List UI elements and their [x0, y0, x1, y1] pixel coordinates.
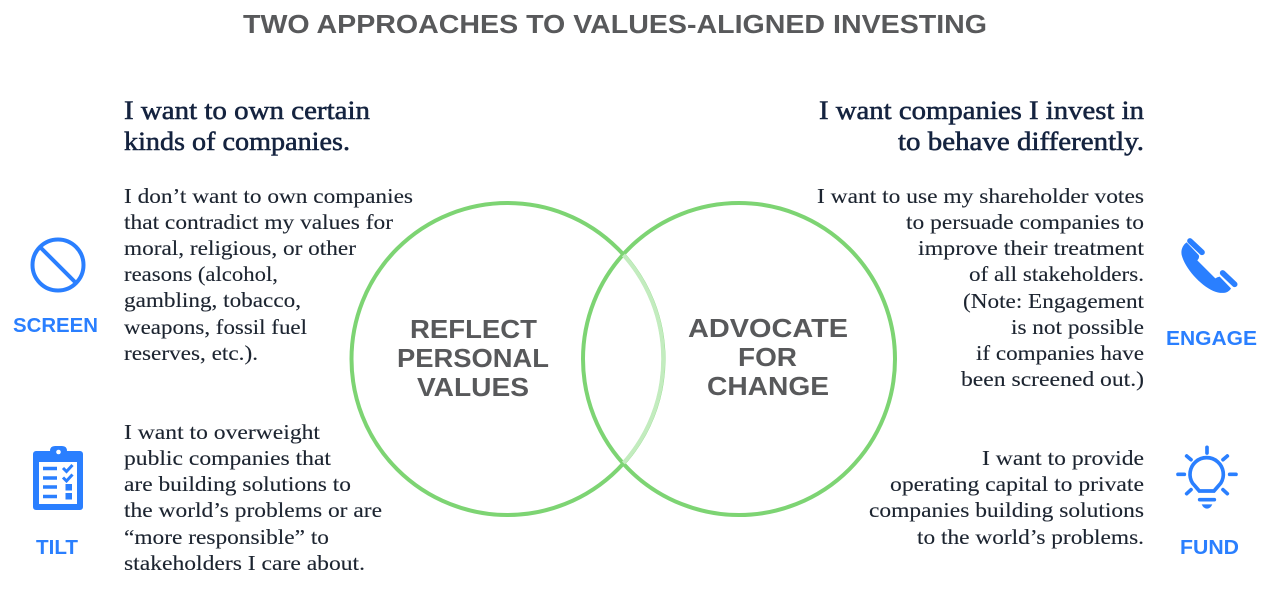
text block: screen: moral, religious, or other	[124, 236, 356, 260]
right heading: to behave differently.	[898, 127, 1144, 156]
overlap light arc	[624, 255, 663, 463]
text block: fund: operating capital to private	[890, 472, 1144, 496]
text block: tilt: the world’s problems or are	[124, 498, 382, 522]
text block: tilt: are building solutions to	[124, 472, 351, 496]
left circle label: REFLECT	[410, 314, 537, 344]
text block: tilt: public companies that	[124, 446, 331, 470]
label: engage: ENGAGE	[1166, 328, 1257, 350]
left heading: I want to own certain	[124, 96, 370, 125]
icon: engage telephone	[1181, 241, 1235, 293]
label: fund: FUND	[1180, 537, 1239, 559]
right circle label	[688, 313, 848, 401]
text block: fund: I want to provide	[982, 446, 1144, 470]
text block: engage: been screened out.)	[961, 367, 1144, 391]
text block: fund: companies building solutions	[869, 498, 1144, 522]
text block: engage: if companies have	[976, 341, 1144, 365]
text block: fund: to the world’s problems.	[917, 525, 1144, 549]
text block: screen: weapons, fossil fuel	[124, 315, 307, 339]
text block: screen: that contradict my values for	[124, 210, 393, 234]
text block: tilt: “more responsible” to	[124, 525, 329, 549]
text block: screen: reasons (alcohol,	[124, 262, 278, 286]
left circle label: VALUES	[417, 372, 529, 402]
text block: screen: reserves, etc.).	[124, 341, 258, 365]
text block: screen: I don’t want to own companies	[124, 184, 413, 208]
text block: tilt: stakeholders I care about.	[124, 551, 365, 575]
label: screen: SCREEN	[13, 315, 98, 337]
text block: tilt	[124, 420, 382, 575]
left heading: kinds of companies.	[124, 127, 350, 156]
left circle label	[397, 314, 549, 402]
text block: fund	[869, 446, 1144, 549]
left circle	[352, 203, 664, 515]
icon: fund light bulb	[1178, 447, 1236, 509]
right heading: I want companies I invest in	[819, 96, 1144, 125]
right circle label: CHANGE	[707, 371, 829, 401]
title: TWO APPROACHES TO VALUES-ALIGNED INVESTING	[243, 11, 987, 39]
right circle label: ADVOCATE	[688, 313, 848, 343]
right heading	[819, 96, 1144, 156]
text block: engage: to persuade companies to	[906, 210, 1144, 234]
right circle	[583, 203, 895, 515]
text block: engage: (Note: Engagement	[963, 289, 1144, 313]
text block: screen: gambling, tobacco,	[124, 288, 301, 312]
icon: screen prohibition sign	[32, 240, 84, 290]
text block: engage: I want to use my shareholder votes	[817, 184, 1144, 208]
label: tilt: TILT	[36, 537, 78, 559]
text block: tilt: I want to overweight	[124, 420, 320, 444]
right circle label: FOR	[738, 342, 797, 372]
icon: tilt clipboard	[33, 446, 83, 510]
text block: engage	[817, 184, 1144, 391]
text block: engage: is not possible	[1011, 315, 1144, 339]
left circle label: PERSONAL	[397, 343, 549, 373]
text block: engage: of all stakeholders.	[969, 262, 1144, 286]
left heading	[124, 96, 370, 156]
text block: screen	[124, 184, 413, 365]
venn diagram	[352, 203, 895, 515]
text block: engage: improve their treatment	[918, 236, 1144, 260]
